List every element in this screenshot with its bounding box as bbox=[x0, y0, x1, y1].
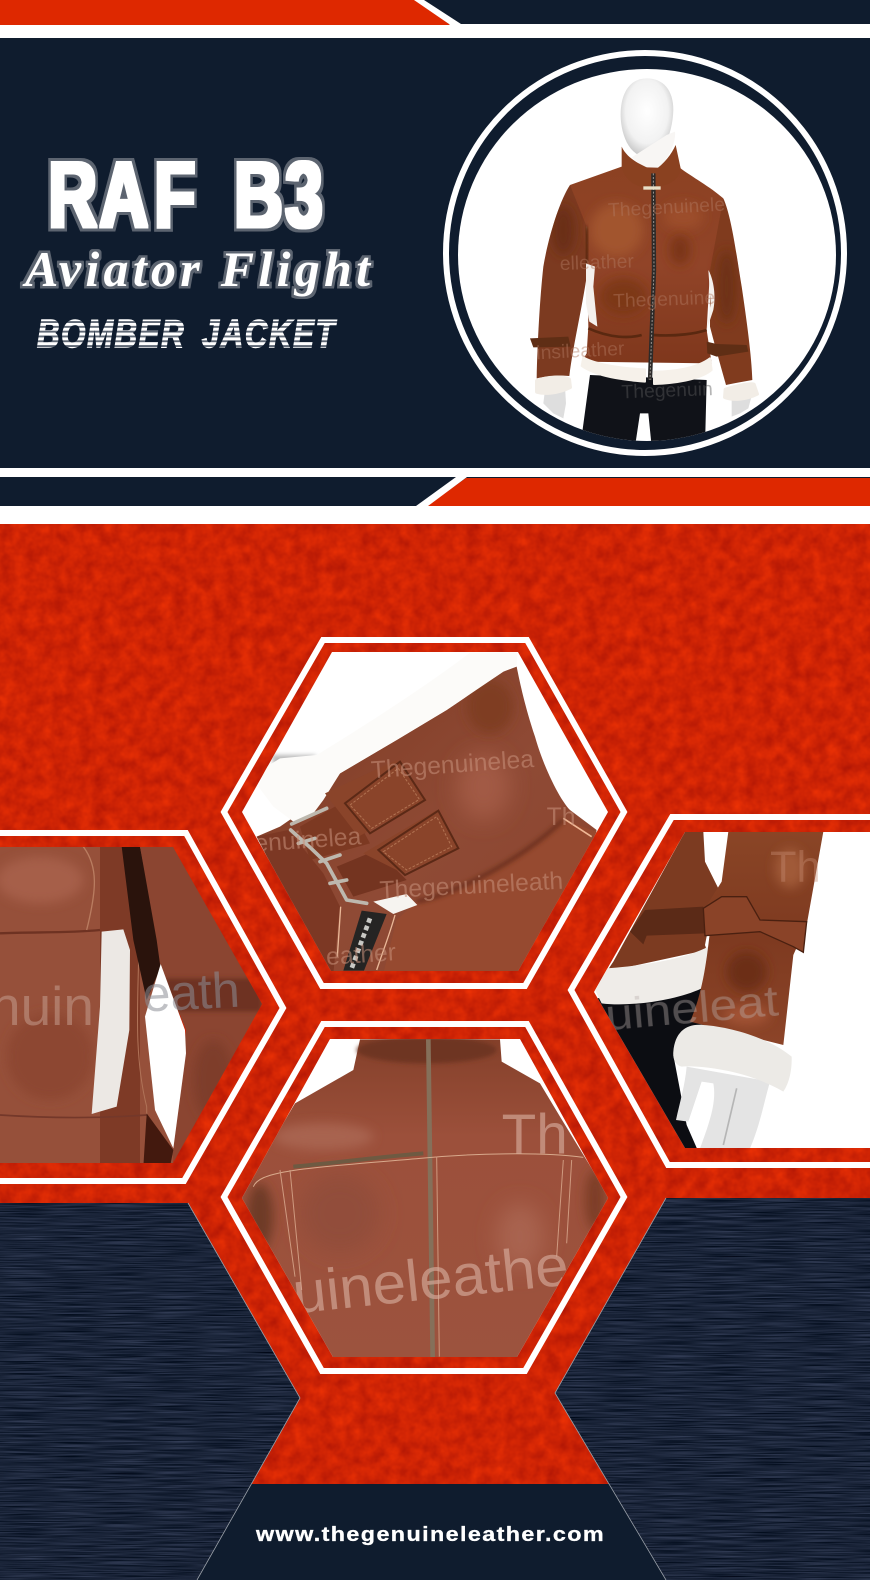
right navy textured panel bbox=[555, 1198, 870, 1580]
jacket on mannequin bbox=[530, 78, 757, 447]
mannequin hand bbox=[676, 1067, 770, 1148]
zipper bbox=[343, 911, 387, 971]
left sleeve bbox=[537, 185, 588, 378]
fur cuff bbox=[673, 1025, 792, 1092]
title: RAF B3: RAF B3 bbox=[48, 143, 323, 248]
sleeve bbox=[690, 832, 823, 1045]
watermark bbox=[254, 746, 575, 971]
collar bbox=[622, 145, 681, 168]
fur cuffs bbox=[537, 377, 757, 399]
watermark: enuinelea bbox=[254, 823, 362, 858]
zipper bbox=[650, 173, 654, 380]
watermark: eath bbox=[141, 962, 241, 1023]
sleeve bbox=[140, 847, 267, 1167]
watermark: uineleathe bbox=[290, 1233, 572, 1326]
mannequin shadow bbox=[272, 755, 317, 780]
dark gap bbox=[122, 847, 162, 1000]
subtitle: Aviator Flight: Aviator Flight bbox=[22, 241, 372, 297]
circular product portrait bbox=[446, 53, 844, 453]
watermark: Th bbox=[502, 1103, 568, 1166]
navy panel edge lines bbox=[188, 1198, 666, 1580]
back shading bbox=[247, 1037, 605, 1270]
torso shading bbox=[552, 203, 737, 337]
hexagon: left pocket detail bbox=[0, 833, 283, 1181]
watermark: Thegenuineleath bbox=[379, 868, 564, 904]
watermarks: Thegenuinele bbox=[607, 195, 726, 222]
watermark bbox=[0, 971, 238, 1026]
watermarks: Thegenuine bbox=[613, 288, 716, 312]
sleeve highlights bbox=[723, 848, 805, 1025]
left navy textured panel bbox=[0, 1203, 300, 1580]
collar shading bbox=[257, 680, 513, 973]
watermark bbox=[603, 844, 821, 1040]
mannequin hands bbox=[543, 392, 751, 418]
hexagon: collar and buckles detail bbox=[224, 640, 624, 986]
watermark bbox=[290, 1103, 572, 1326]
front shading bbox=[0, 847, 147, 1163]
watermarks bbox=[536, 195, 726, 403]
silver buckles bbox=[291, 808, 367, 903]
fur collar bbox=[258, 653, 517, 822]
inner white collar bbox=[632, 132, 675, 168]
strap lower bbox=[337, 810, 458, 897]
jacket back bbox=[240, 1039, 610, 1363]
pants bbox=[582, 375, 707, 447]
body strap bbox=[630, 907, 705, 944]
collar leather bbox=[257, 667, 597, 973]
subtitle: Bomber Jacket: BOMBER bbox=[37, 313, 185, 356]
header title bbox=[22, 143, 372, 356]
sleeve strap bbox=[703, 897, 807, 952]
collar seams bbox=[417, 818, 592, 902]
watermarks: elleather bbox=[559, 251, 635, 275]
underarm gap bbox=[145, 964, 186, 1148]
jacket body bbox=[607, 832, 718, 972]
navy footer panel bbox=[0, 1484, 870, 1580]
watermarks: Thegenuin bbox=[621, 379, 713, 403]
header top stripe bbox=[0, 0, 870, 25]
header navy panel bbox=[0, 38, 870, 468]
pants bbox=[597, 985, 710, 1152]
fur tuft bbox=[373, 894, 417, 914]
hexagon: back of jacket detail bbox=[224, 1024, 624, 1371]
jacket front bbox=[0, 847, 173, 1167]
subtitle: Bomber Jacket: JACKET bbox=[202, 313, 338, 356]
watermark: Th bbox=[547, 804, 575, 831]
website url: www.thegenuineleather.com bbox=[255, 1524, 605, 1546]
sleeve shading bbox=[165, 978, 262, 1120]
watermarks: insileather bbox=[536, 339, 625, 364]
watermark: eather bbox=[325, 939, 397, 971]
right sleeve bbox=[710, 198, 752, 385]
torso bbox=[570, 167, 723, 363]
sleeve straps bbox=[530, 337, 748, 357]
fur hem bbox=[595, 947, 708, 1004]
watermark: Th bbox=[770, 844, 821, 892]
watermark: Thegenuinelea bbox=[370, 746, 535, 784]
mannequin head bbox=[621, 78, 673, 157]
collar fastener bbox=[643, 186, 661, 190]
red textured panel bbox=[0, 524, 870, 1484]
watermark: uineleat bbox=[603, 977, 780, 1040]
lower dark corner bbox=[143, 1113, 173, 1167]
fur hem bbox=[582, 357, 712, 384]
strap upper bbox=[300, 760, 427, 860]
fur pocket trim bbox=[92, 929, 130, 1114]
pocket slits bbox=[586, 263, 714, 330]
lower jacket panel bbox=[383, 820, 597, 973]
header bottom stripe bbox=[0, 477, 870, 506]
hexagon: right sleeve detail bbox=[571, 817, 870, 1165]
hand shading bbox=[723, 1088, 737, 1145]
yoke and center seams bbox=[253, 1039, 583, 1358]
